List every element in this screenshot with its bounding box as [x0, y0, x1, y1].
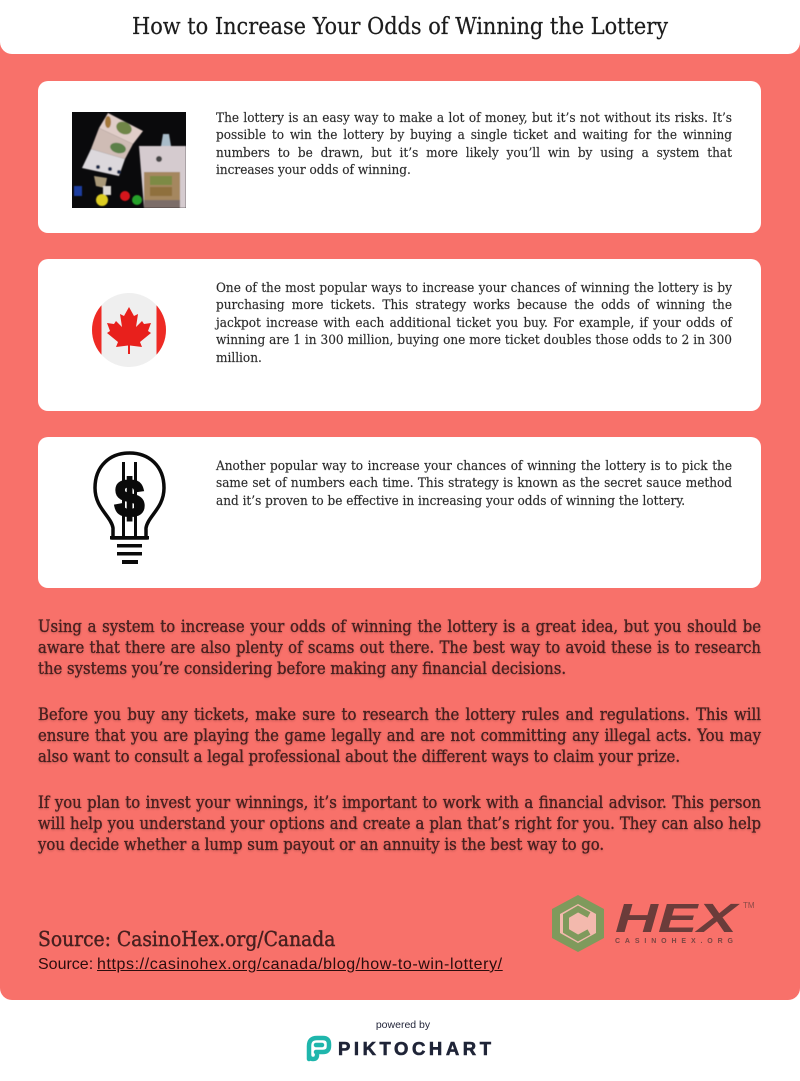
- panel: intro card: [38, 81, 761, 233]
- text: same numbers paragraph: and it’s proven to be effective in increasing your odds of winning the lottery.: [216, 494, 685, 509]
- logo: CasinoHex: HEX: [615, 895, 741, 941]
- text: intro paragraph: possible to win the lottery by buying a single ticket and waiting for the winning: [216, 128, 732, 143]
- text: rules paragraph: Before you buy any tickets, make sure to research the lottery rules and regulations. This will: [38, 705, 761, 724]
- text: rules paragraph: ensure that you are playing the game legally and are not committing any illegal acts. You may: [38, 726, 761, 745]
- logo: Piktochart: PIKTOCHART: [338, 1038, 492, 1059]
- logo: Piktochart: [306, 1036, 492, 1062]
- logo: CasinoHex: TM: [743, 901, 755, 910]
- text: rules paragraph: [38, 705, 762, 768]
- panel: tickets card: [38, 259, 761, 411]
- powered by label: powered by: [376, 1019, 430, 1031]
- icon: Canadian flag: [92, 293, 166, 367]
- text: tickets paragraph: winning are 1 in 300 million, buying one more ticket doubles those odds to 2 in 300: [216, 333, 732, 348]
- text: rules paragraph: also want to consult a legal professional about the different ways to claim your prize.: [38, 747, 680, 766]
- panel: same numbers card: [38, 437, 761, 588]
- text: scams paragraph: [38, 617, 761, 680]
- text: scams paragraph: the systems you’re considering before making any financial decisions.: [38, 659, 566, 678]
- text: advisor paragraph: [38, 793, 762, 856]
- text: tickets paragraph: One of the most popular ways to increase your chances of winning the lottery is by: [216, 281, 732, 296]
- text: intro paragraph: [216, 111, 732, 178]
- text: tickets paragraph: purchasing more tickets. This strategy works because the odds of winning the: [216, 298, 732, 313]
- text: advisor paragraph: will help you understand your options and create a plan that’s right for you. They can also help: [38, 814, 761, 833]
- source heading: Source: CasinoHex.org/Canada: [38, 927, 335, 951]
- logo: CasinoHex: [552, 895, 755, 952]
- logo: CasinoHex: CASINOHEX.ORG: [615, 938, 734, 945]
- text: scams paragraph: aware that there are also plenty of scams out there. The best way to avoid these is to research: [38, 638, 761, 657]
- text: intro paragraph: The lottery is an easy way to make a lot of money, but it’s not without its risks. It’s: [216, 111, 732, 126]
- text: intro paragraph: numbers to be drawn, but it’s more likely you’ll win by using a system that: [216, 146, 732, 161]
- title: How to Increase Your Odds of Winning the Lottery: [132, 13, 668, 40]
- text: tickets paragraph: million.: [216, 351, 262, 366]
- icon: light bulb with dollar sign: [93, 451, 166, 564]
- source link: Source:: [38, 956, 93, 973]
- text: same numbers paragraph: Another popular way to increase your chances of winning the lottery is to pick the: [216, 459, 732, 474]
- text: tickets paragraph: [214, 281, 733, 366]
- text: tickets paragraph: jackpot increase with each additional ticket you buy. For example, if your odds of: [216, 316, 732, 331]
- text: advisor paragraph: If you plan to invest your winnings, it’s important to work with a financial advisor. This person: [38, 793, 761, 812]
- text: same numbers paragraph: same set of numbers each time. This strategy is known as the secret sauce method: [216, 476, 732, 491]
- text: same numbers paragraph: [216, 459, 732, 509]
- text: intro paragraph: increases your odds of winning.: [216, 163, 411, 178]
- text: scams paragraph: Using a system to increase your odds of winning the lottery is a great idea, but you should be: [38, 617, 761, 636]
- header bar with title: [0, 0, 800, 54]
- text: advisor paragraph: you decide whether a lump sum payout or an annuity is the best way to go.: [38, 835, 604, 854]
- image: house of cards and dice: [72, 112, 186, 208]
- source link: https://casinohex.org/canada/blog/how-to-win-lottery/: [97, 956, 503, 973]
- icon: light bulb with dollar sign: $: [115, 470, 144, 528]
